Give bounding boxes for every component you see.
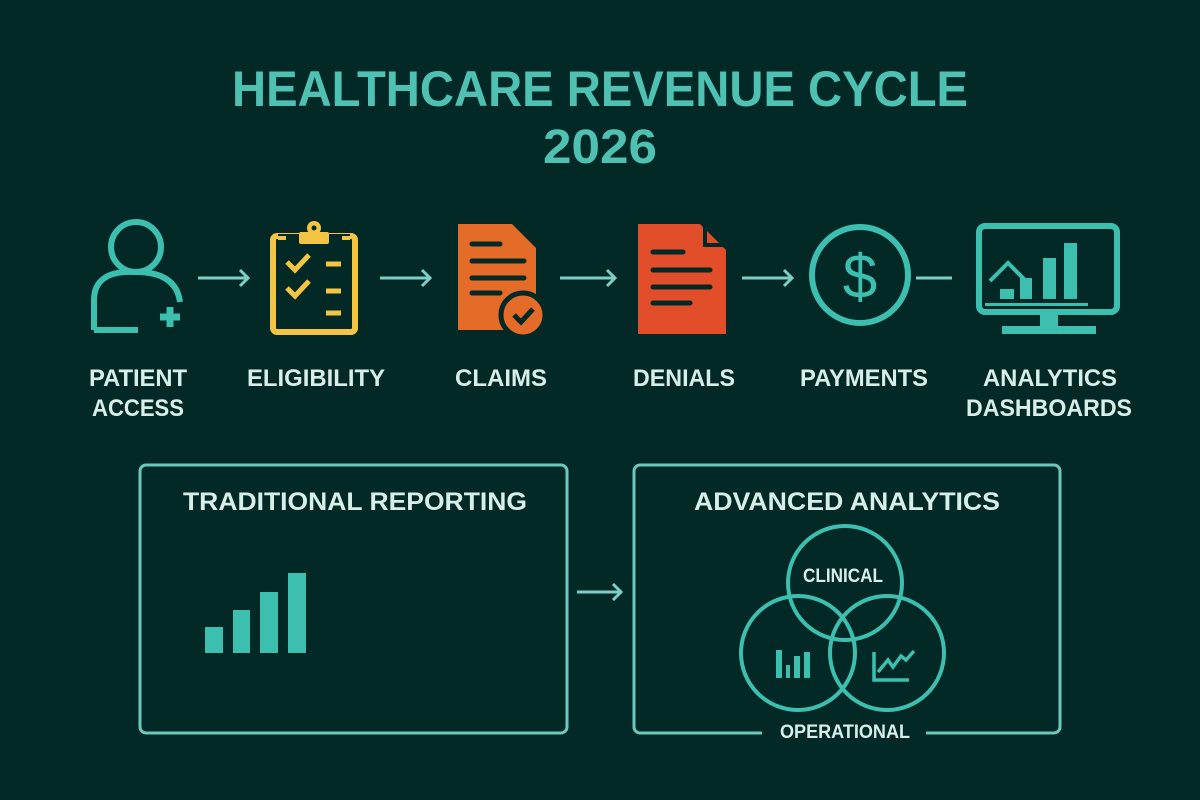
step labels: PAYMENTS xyxy=(800,365,928,392)
panel: advanced analytics: CLINICAL xyxy=(803,566,883,587)
title: HEALTHCARE REVENUE CYCLE xyxy=(232,61,968,117)
step labels xyxy=(89,365,1132,422)
step labels: ANALYTICS xyxy=(983,365,1117,392)
panel: traditional reporting: TRADITIONAL REPORTING xyxy=(183,488,527,516)
title xyxy=(232,61,968,174)
panel: traditional reporting xyxy=(140,465,567,733)
connector xyxy=(916,276,952,280)
panel: advanced analytics xyxy=(634,465,1060,744)
venn diagram xyxy=(741,526,944,710)
title: 2026 xyxy=(543,121,657,174)
panel: advanced analytics: ADVANCED ANALYTICS xyxy=(694,488,1000,516)
step labels: DASHBOARDS xyxy=(966,395,1132,422)
arrow 4 xyxy=(742,270,792,286)
step labels: PATIENT xyxy=(89,365,187,392)
bar chart xyxy=(205,573,306,653)
arrow: between panels xyxy=(577,584,621,600)
step labels: CLAIMS xyxy=(455,365,547,392)
icon: analytics dashboard xyxy=(979,226,1117,334)
panel: advanced analytics: OPERATIONAL xyxy=(780,722,910,743)
icon: line chart in venn xyxy=(874,651,914,680)
arrow 1 xyxy=(198,270,248,286)
step labels: ACCESS xyxy=(92,395,184,422)
icon: patient access xyxy=(94,222,180,330)
icon: payments xyxy=(812,227,908,323)
arrow 2 xyxy=(380,270,430,286)
step labels: DENIALS xyxy=(633,365,735,392)
icon: bars in venn xyxy=(776,650,810,678)
step labels: ELIGIBILITY xyxy=(247,365,385,392)
icon: eligibility clipboard xyxy=(273,221,355,332)
icon: claims document xyxy=(440,0,545,337)
arrow 3 xyxy=(560,270,615,286)
icon: payments: $ xyxy=(843,243,877,312)
icon: denials document xyxy=(638,224,726,334)
